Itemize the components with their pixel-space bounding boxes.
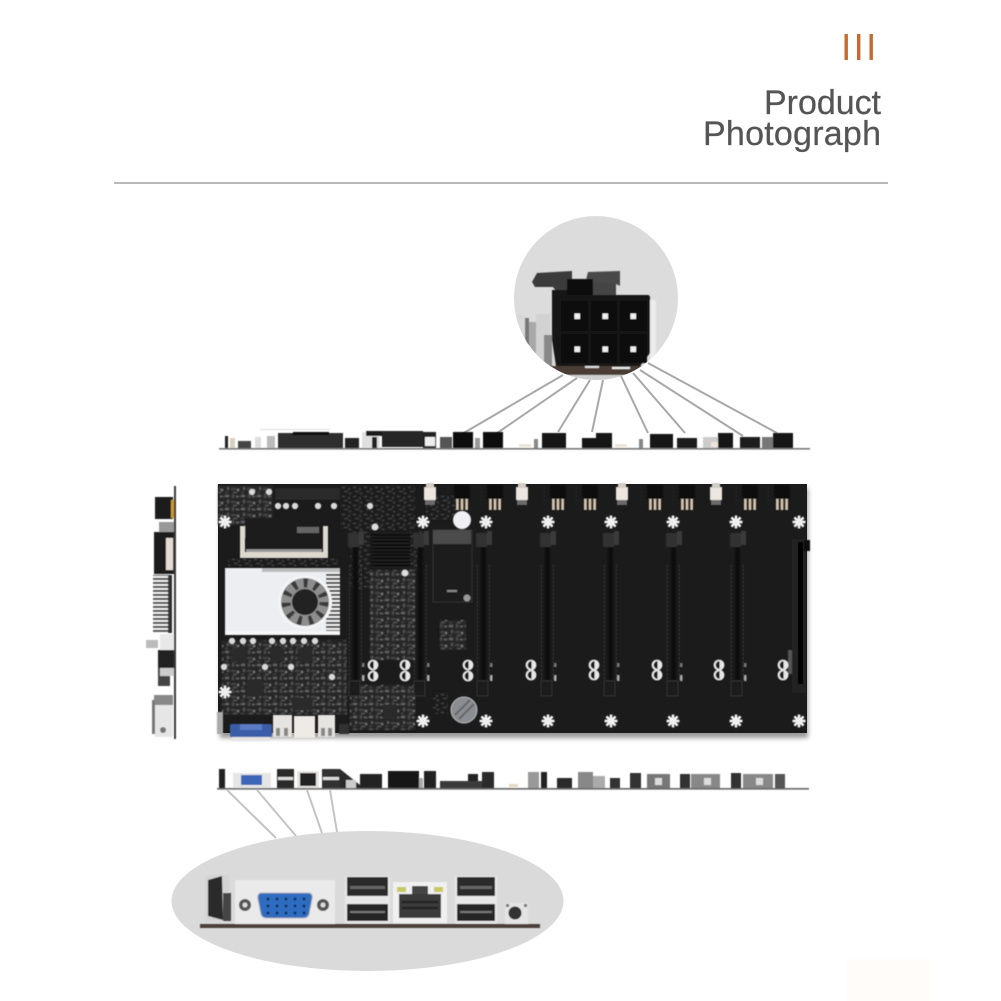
row of capacitors below heatsink [221,638,335,680]
small capacitors top left [249,489,373,509]
RJ45 LAN port [393,882,447,923]
cooled CPU heat sink [372,524,410,576]
white capacitor [453,511,471,529]
push button [505,903,528,924]
title: Product Photograph [703,84,882,153]
callout lines: rear ports to ellipse [227,790,337,838]
callout ellipse: rear I/O close-up [172,831,564,971]
24-pin ATX connector [275,488,340,500]
bottom edge view of board [217,769,809,790]
board edge under connector [540,366,655,375]
last open PCIe slot with latch [788,539,810,693]
title: Product Photograph: Photograph [703,115,881,153]
capacitors behind connector [516,300,656,374]
6-pin connector pin rows [448,485,790,510]
top edge view of board [219,429,810,450]
six pin sockets [561,301,647,363]
mounting holes [218,516,806,728]
VGA port [235,880,335,925]
circuitry: dense component areas [218,485,466,730]
board drop shadow [220,488,808,738]
side view of board [146,486,176,739]
section marker: three orange bars [844,34,873,60]
coin battery [451,697,477,723]
faint bottom-right patch [846,959,930,1001]
board edge [200,924,540,928]
PCB [218,484,807,733]
rear ports on top view [217,712,349,741]
M.2 slot outline and socket [433,530,472,602]
dual USB port [455,876,497,923]
white fan headers [424,483,722,505]
dual USB port [345,876,390,923]
connector latches [532,271,620,297]
main board: top view [217,483,810,741]
callout lines: power connectors to top strip [462,363,777,438]
mSATA / mini-PCIe socket [240,518,328,558]
callout circle: 6-pin power connector close-up [514,216,678,383]
title: Product Photograph: Product [764,84,882,122]
connector body [552,290,650,366]
slot capacitor pairs [368,660,788,681]
HDMI port [205,875,231,921]
white GPU-style heatsink with fan [225,568,340,635]
small chips near VRM [232,648,397,719]
PCIe slots [348,531,746,696]
header divider [114,182,888,184]
